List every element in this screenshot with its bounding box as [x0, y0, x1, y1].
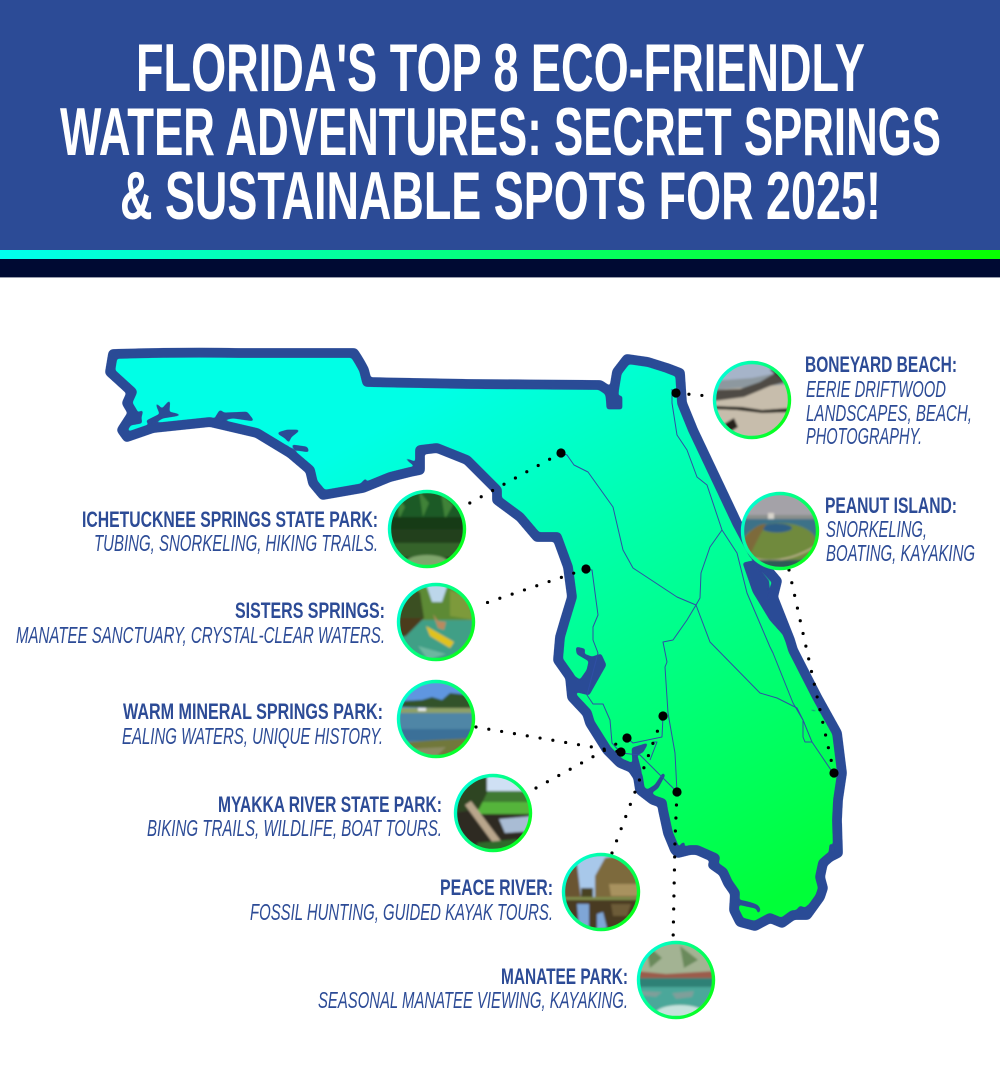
label: Peace River: FOSSIL HUNTING, GUIDED KAYAK TOURS. [250, 899, 553, 925]
label: Peace River: PEACE RIVER: [440, 875, 553, 900]
photo: Boneyard Beach [712, 360, 792, 440]
label: Manatee Park: SEASONAL MANATEE VIEWING, KAYAKING. [318, 987, 628, 1013]
label: Sisters Springs: SISTERS SPRINGS: [235, 598, 385, 623]
label: Warm Mineral Springs Park: WARM MINERAL SPRINGS PARK: [123, 699, 383, 724]
dotted connectors [468, 393, 834, 945]
label: Warm Mineral Springs Park [122, 699, 383, 749]
state fill [110, 353, 842, 926]
label: Boneyard Beach: PHOTOGRAPHY. [806, 423, 922, 449]
header banner [0, 0, 1000, 277]
photo: Sisters Springs [396, 582, 476, 662]
label: Myakka River State Park: BIKING TRAILS, WILDLIFE, BOAT TOURS. [147, 815, 442, 841]
label: Peanut Island [825, 493, 975, 566]
label: Ichetucknee Springs State Park [82, 507, 378, 556]
label: Ichetucknee Springs State Park: TUBING, SNORKELING, HIKING TRAILS. [94, 530, 378, 556]
location markers [556, 388, 839, 797]
label: Myakka River State Park [147, 792, 442, 841]
photo: Peanut Island [740, 491, 820, 572]
label: Sisters Springs: MANATEE SANCTUARY, CRYSTAL-CLEAR WATERS. [16, 622, 385, 648]
label: Boneyard Beach [805, 352, 972, 449]
label: Myakka River State Park: MYAKKA RIVER STATE PARK: [218, 792, 442, 817]
photo: Manatee Park [636, 940, 716, 1021]
photo: Warm Mineral Springs [396, 679, 476, 759]
title [60, 30, 941, 234]
photo: Myakka River [453, 773, 533, 853]
label: Manatee Park: MANATEE PARK: [501, 964, 628, 989]
label: Manatee Park [318, 964, 628, 1013]
photo: Ichetucknee Springs [387, 489, 467, 571]
label: Peace River [250, 875, 553, 925]
label: Warm Mineral Springs Park: EALING WATERS, UNIQUE HISTORY. [122, 723, 383, 749]
highway routes [561, 389, 833, 792]
label: Ichetucknee Springs State Park: ICHETUCKNEE SPRINGS STATE PARK: [82, 507, 378, 532]
label: Peanut Island: SNORKELING, [826, 516, 927, 542]
map of Florida [110, 353, 842, 926]
state outline and bays [110, 353, 842, 926]
photo: Peace River [561, 852, 641, 932]
label: Sisters Springs [16, 598, 385, 648]
